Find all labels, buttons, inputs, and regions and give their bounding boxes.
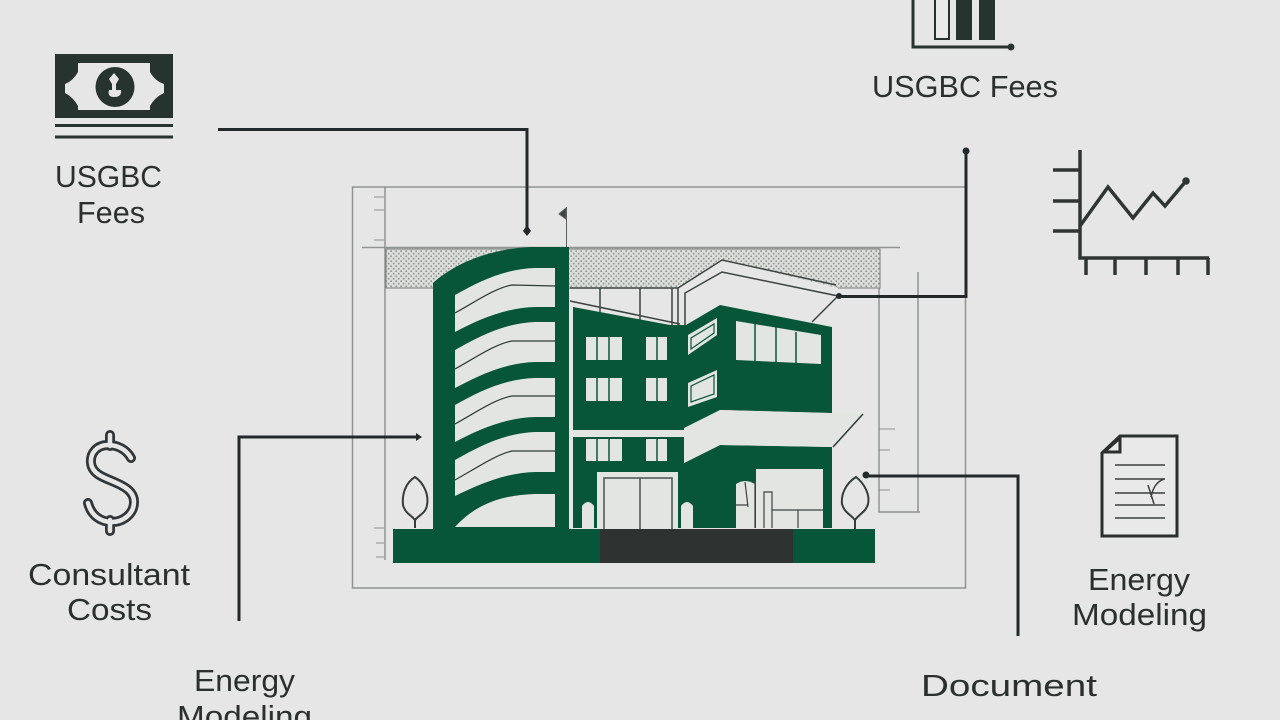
label: USGBC Fees left <box>55 159 162 230</box>
main block upper storeys <box>573 305 832 431</box>
icon: bar chart <box>913 0 1014 50</box>
label: Energy Modeling right: Modeling <box>1072 597 1207 632</box>
dotted roof band <box>386 249 880 288</box>
tower windows <box>455 268 555 527</box>
angled windows <box>688 318 717 407</box>
label: Energy Modeling bottom: Energy <box>194 663 296 698</box>
icon: banknote <box>55 54 173 137</box>
tower window mullions <box>455 285 555 480</box>
connector arrow: bottom left <box>239 433 422 621</box>
left tree <box>403 477 427 528</box>
ground floor openings <box>582 469 823 528</box>
base plinth <box>393 529 875 563</box>
window mullions <box>597 337 657 461</box>
connector arrow: top left <box>218 130 531 236</box>
curved tower <box>433 247 569 529</box>
label: Energy Modeling bottom <box>177 663 312 720</box>
label: Consultant Costs <box>28 557 190 627</box>
connector arrow: bottom right <box>862 472 1018 636</box>
canopy <box>684 410 863 463</box>
icon: line chart <box>1053 150 1209 275</box>
large window <box>736 321 821 364</box>
connector arrow: top right <box>836 148 970 299</box>
right tree <box>842 477 868 529</box>
white floor strip <box>573 430 684 436</box>
label: Energy Modeling right: Energy <box>1088 562 1191 597</box>
upper roof outline <box>570 260 838 326</box>
icon: dollar sign <box>88 435 134 531</box>
label: USGBC Fees left: Fees <box>77 195 145 230</box>
label: Document: Document <box>921 668 1097 703</box>
entrance doors <box>597 472 678 529</box>
icon: document <box>1102 436 1177 536</box>
building illustration <box>393 207 875 563</box>
label: Energy Modeling right <box>1072 562 1207 632</box>
blueprint frame and drafting lines <box>352 187 966 588</box>
grid windows <box>586 337 667 461</box>
entrance step <box>600 529 793 563</box>
label: USGBC Fees left: USGBC <box>55 159 162 194</box>
label: USGBC Fees top: USGBC Fees <box>872 69 1058 104</box>
label: Consultant Costs: Costs <box>67 592 152 627</box>
flag <box>559 207 566 247</box>
label: Consultant Costs: Consultant <box>28 557 190 592</box>
main block lower storey <box>573 437 832 528</box>
